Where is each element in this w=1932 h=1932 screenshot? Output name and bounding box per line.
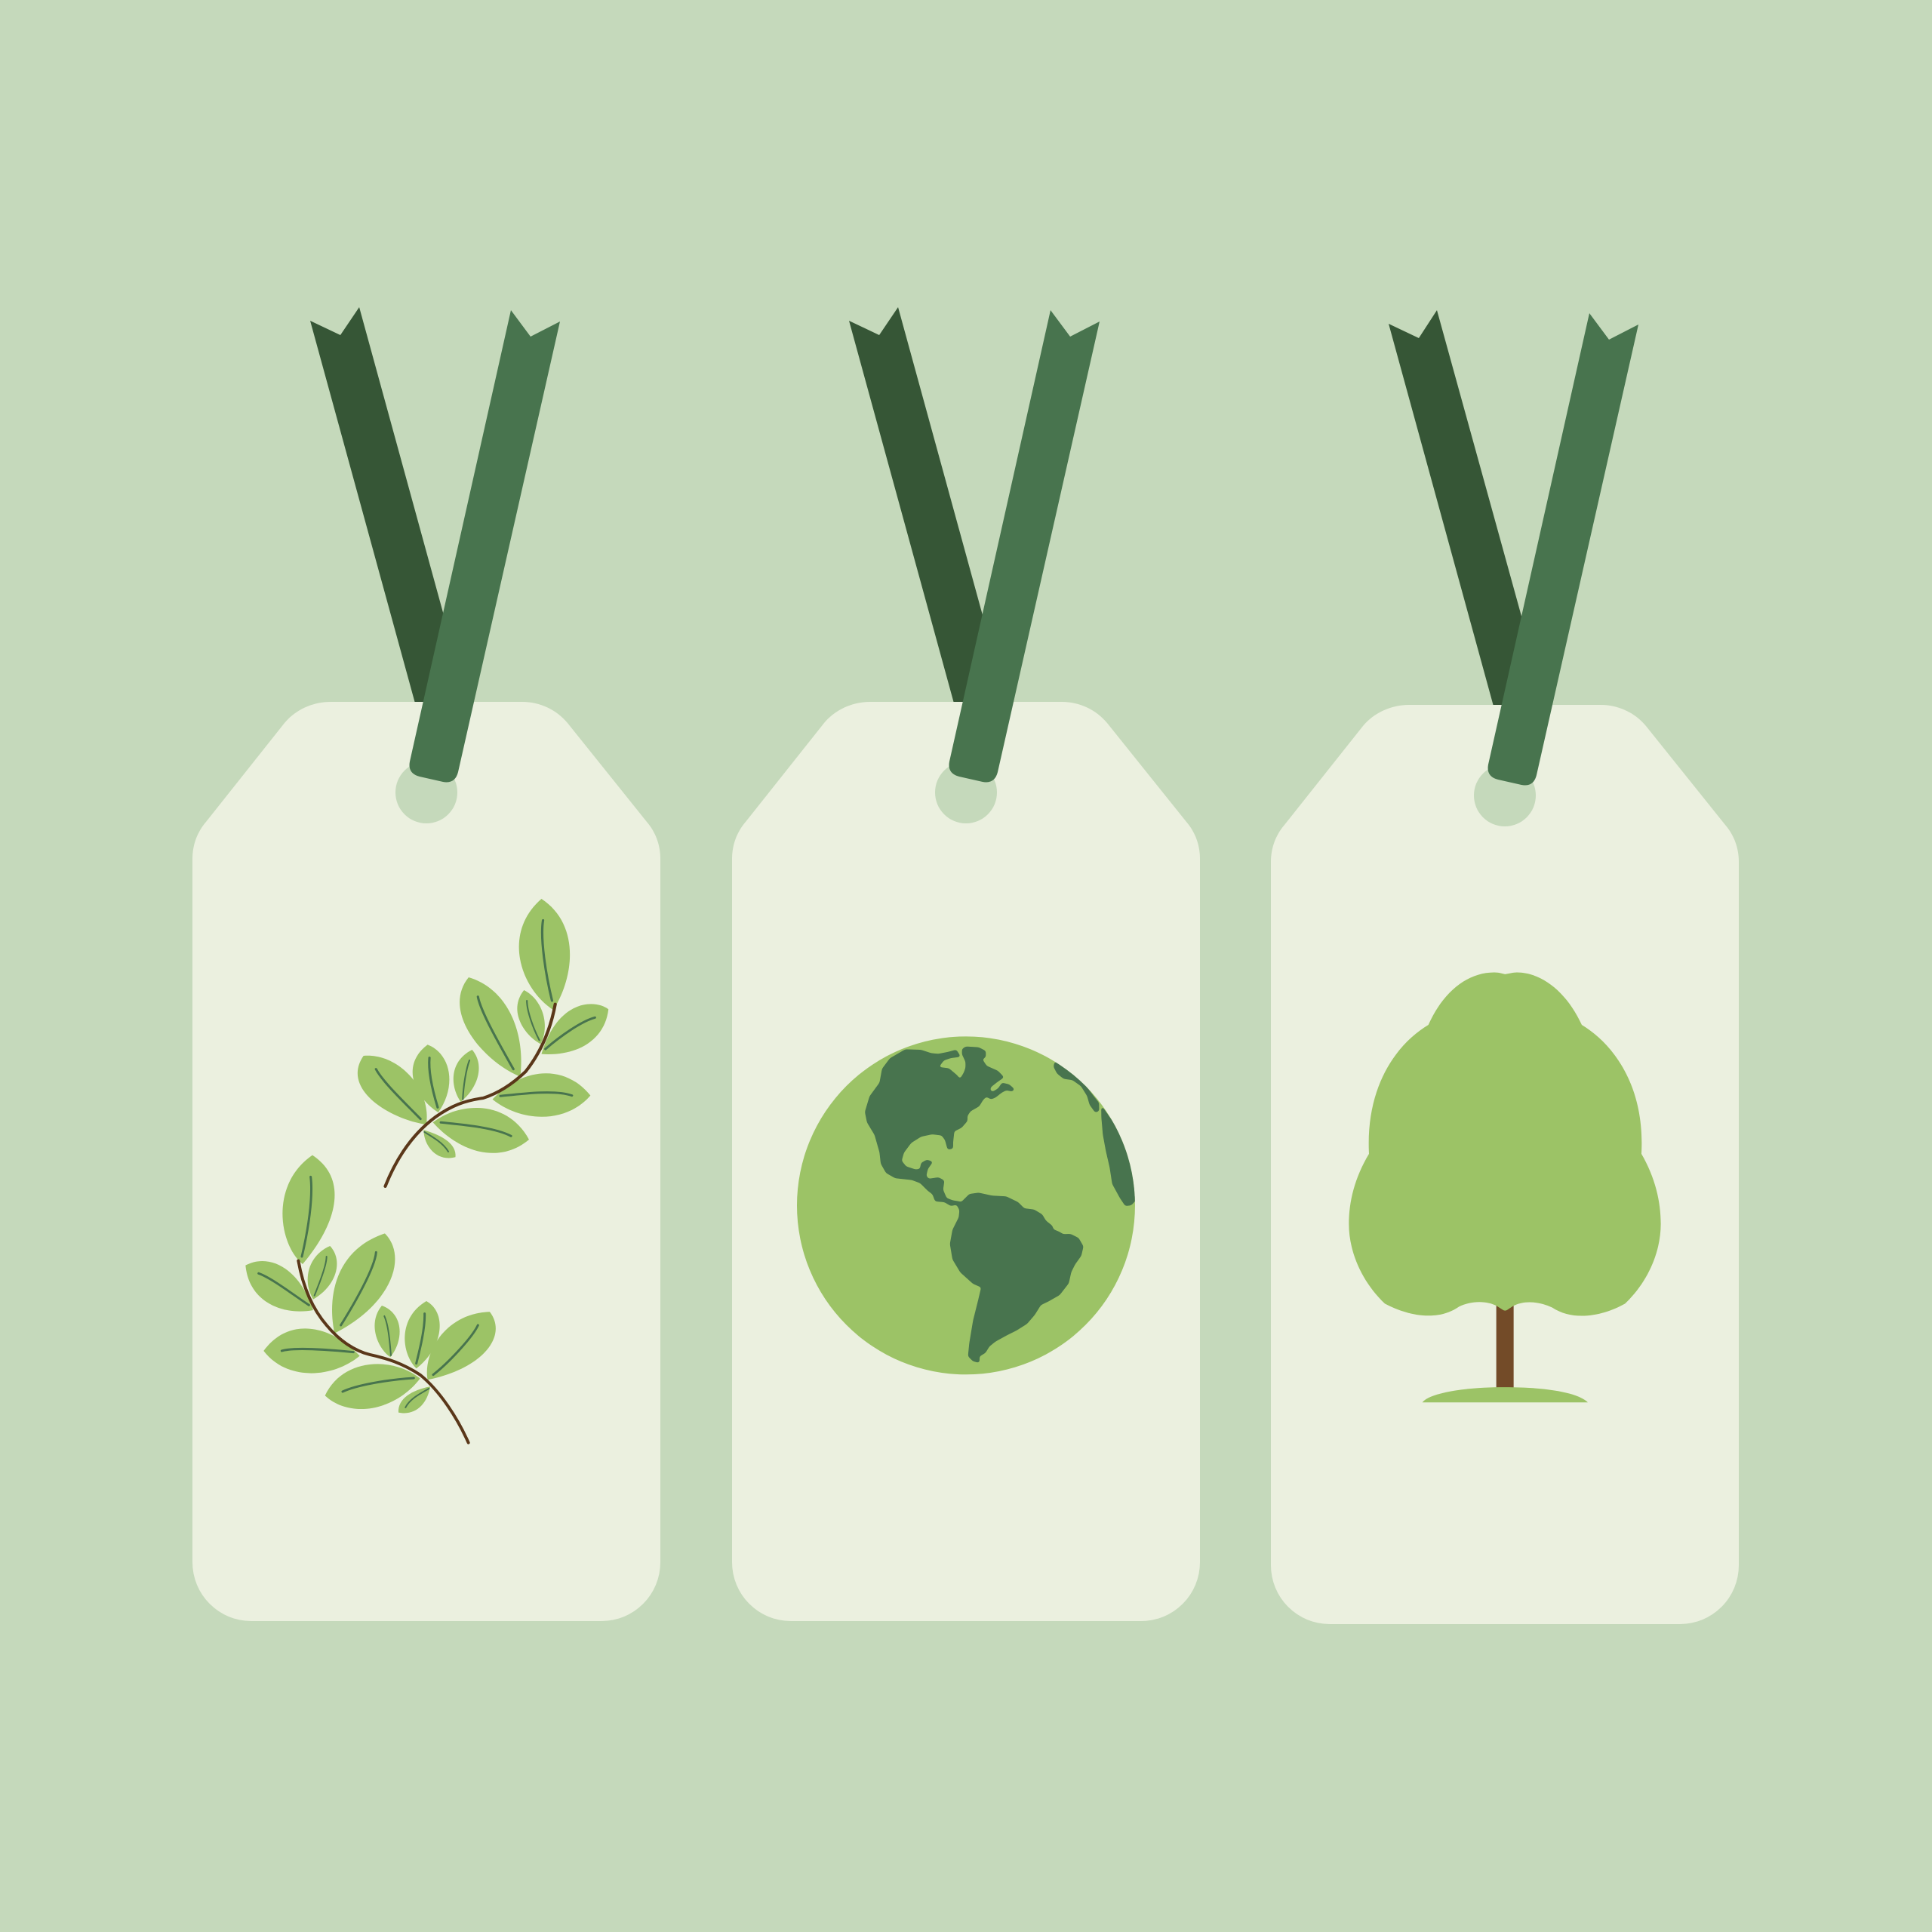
- icon: upper leaf branch: [358, 899, 608, 1186]
- tag body: [192, 702, 660, 1621]
- ribbon: dark back strap: [310, 307, 472, 717]
- ribbon: light front strap: [410, 310, 560, 782]
- tag body: [732, 702, 1200, 1621]
- panel: tree tag: [1271, 310, 1739, 1624]
- icon: tree: [1349, 972, 1661, 1402]
- tag body: [1271, 705, 1739, 1624]
- panel: globe tag: [732, 307, 1200, 1621]
- ribbon: light front strap: [949, 310, 1100, 782]
- panel: leaf branches tag: [192, 307, 660, 1621]
- tag hole: [935, 761, 997, 823]
- ribbon: dark back strap: [849, 307, 1011, 717]
- icon: lower leaf branch: [245, 1155, 496, 1443]
- tag hole: [1474, 764, 1536, 826]
- ribbon: dark back strap: [1389, 310, 1550, 720]
- tag hole: [395, 761, 457, 823]
- icon: globe: [797, 1036, 1137, 1374]
- ribbon: light front strap: [1488, 313, 1638, 785]
